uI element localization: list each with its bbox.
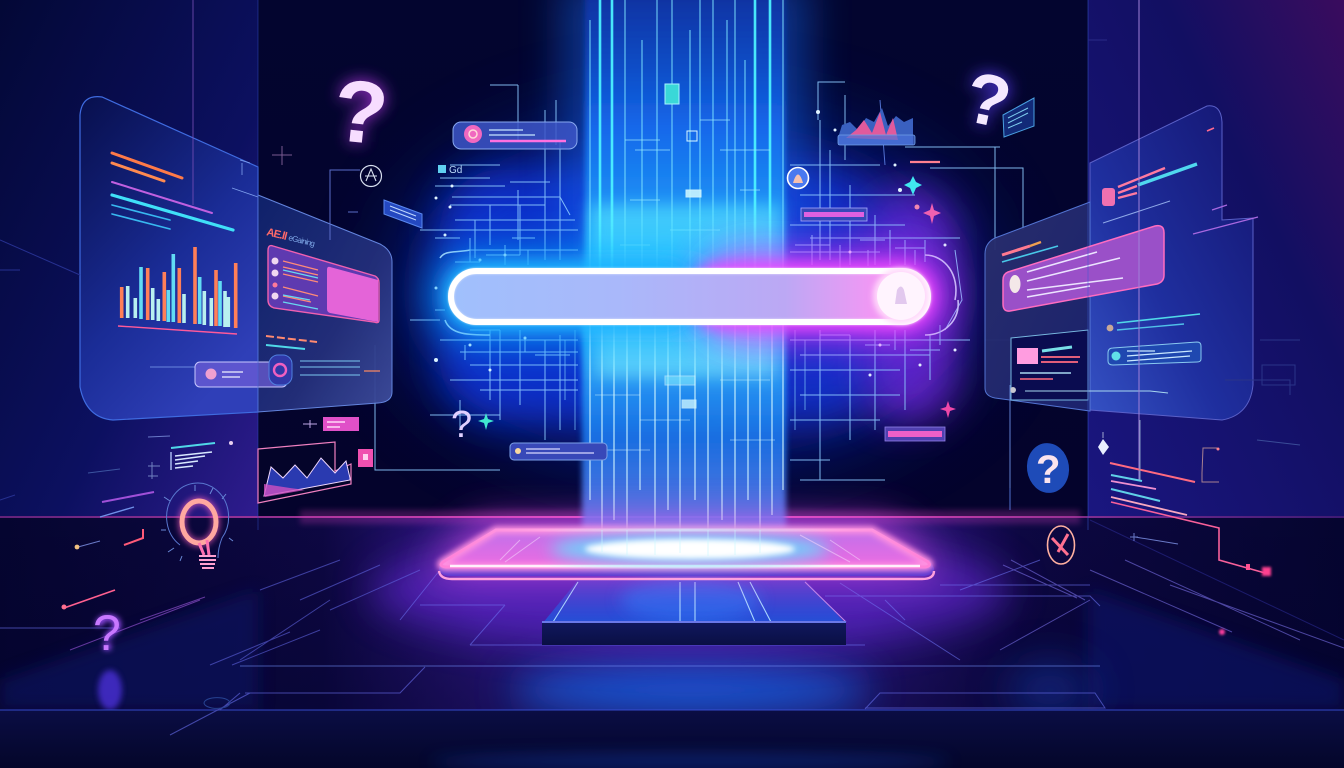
card: lower center pill <box>510 443 607 460</box>
label: glitch text: Gd <box>449 165 462 176</box>
pedestal lines <box>553 582 846 622</box>
left wall fragments <box>0 0 258 610</box>
right wall list <box>1110 463 1265 573</box>
card: small tilted note left <box>384 200 422 228</box>
bar: lower right pink label <box>885 427 945 441</box>
chart: top right area chart <box>838 108 915 145</box>
icon: small diamond <box>1098 432 1109 455</box>
question mark: bottom left neon: ? <box>93 605 124 661</box>
search button <box>873 268 929 324</box>
question badge <box>1024 440 1072 496</box>
panel accents <box>150 0 258 367</box>
floor circuit lines <box>0 520 1344 735</box>
blue pill <box>1108 342 1201 365</box>
panel: left dashboard <box>80 0 392 420</box>
floor <box>0 518 1344 720</box>
pink circuit trace <box>1111 502 1265 573</box>
card: tilted note right <box>1003 98 1034 137</box>
search bar glow <box>430 250 950 342</box>
beam on platform <box>500 530 860 562</box>
bar chart <box>118 247 237 334</box>
status lines <box>1107 314 1200 331</box>
light platform <box>425 522 945 579</box>
label: AE.ll <box>265 226 289 243</box>
search bar <box>451 268 929 324</box>
pink card <box>268 246 379 323</box>
beam center details <box>665 84 701 408</box>
circuit dots <box>434 110 956 376</box>
question badge: ? <box>1036 448 1060 492</box>
inner document <box>1010 330 1168 400</box>
chart card: mini area chart <box>258 442 373 503</box>
pedestal block <box>542 621 846 645</box>
platform light pool <box>550 534 830 564</box>
heading lines <box>112 153 233 230</box>
bar: pink status top right <box>801 162 940 221</box>
platform glow and pedestal <box>542 578 846 645</box>
question mark: top left: ? <box>329 60 393 164</box>
right wall fragments <box>1010 385 1300 635</box>
card: top left search pill <box>453 122 577 149</box>
vertical accent <box>1088 0 1300 530</box>
question mark: top left: ? <box>329 60 393 164</box>
search pill <box>195 355 292 387</box>
icon: crossed tools badge <box>1048 526 1074 564</box>
vertical light beam lower <box>565 320 805 548</box>
panel: left dashboard: eGaining <box>288 233 316 248</box>
pink card <box>1003 226 1164 311</box>
header lines <box>1002 128 1258 262</box>
label: glitch text <box>438 165 462 176</box>
panel: right dashboard <box>985 0 1300 530</box>
vertical light beam upper <box>560 0 810 275</box>
small meta lines <box>266 336 380 375</box>
question mark: bottom left neon: ? <box>93 605 121 661</box>
bottom ledge <box>0 710 1344 768</box>
icon: lightbulb <box>161 483 233 568</box>
stars <box>478 176 956 430</box>
circuit network <box>375 82 1090 510</box>
icon: circled glyph left <box>272 146 382 240</box>
tag: pink label <box>303 417 359 431</box>
question mark: small center left: ? <box>451 404 472 446</box>
question mark: top right: ? <box>958 57 1018 144</box>
question mark: top right: ? <box>958 57 1018 144</box>
icon: ring badge <box>788 168 808 188</box>
horizon glow line <box>0 510 1344 524</box>
